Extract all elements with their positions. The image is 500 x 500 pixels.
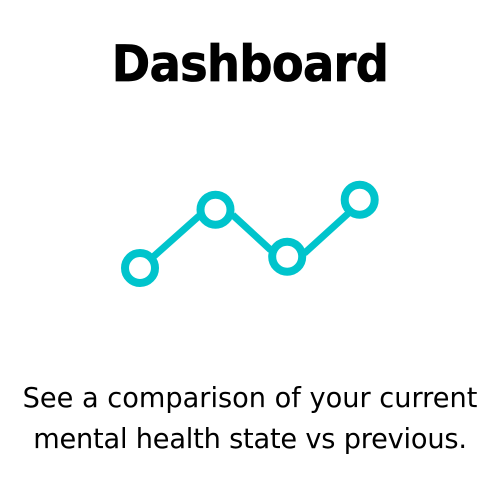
- description text: See a comparison of your current: [23, 383, 477, 414]
- title: Dashboard: [112, 35, 388, 93]
- description text: mental health state vs previous.: [33, 424, 467, 455]
- description text: [23, 383, 477, 455]
